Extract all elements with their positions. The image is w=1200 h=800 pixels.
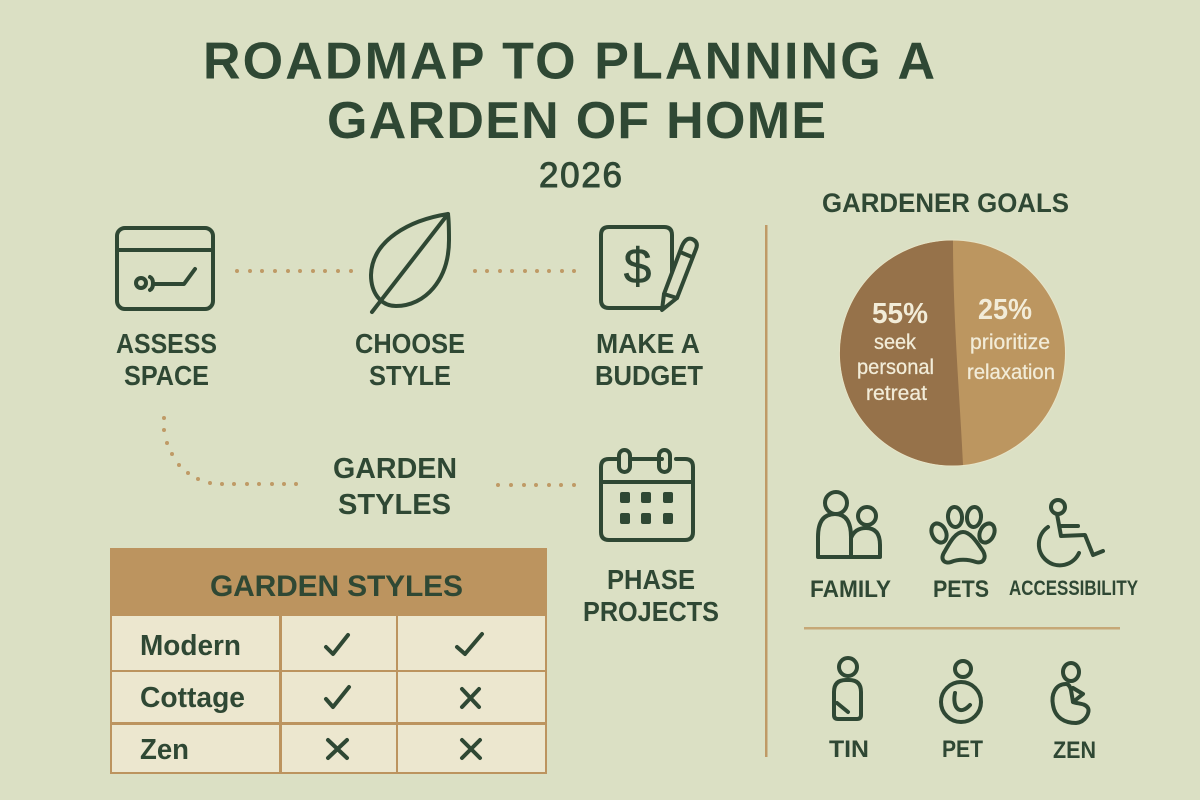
row: zen (140, 734, 480, 766)
row: cottage (140, 682, 479, 714)
icon: budget sheet and pencil (601, 227, 697, 310)
step: choose style: STYLE (369, 360, 451, 391)
step: assess space: SPACE (124, 360, 209, 391)
slice label: 55% (857, 298, 934, 405)
title (203, 32, 935, 150)
goal: accessibility: ACCESSIBILITY (1009, 577, 1138, 600)
item: zen: ZEN (1053, 737, 1096, 764)
icon: assess space (117, 228, 213, 309)
row: modern: Modern (140, 630, 241, 662)
icon: wheelchair (1039, 500, 1103, 565)
slice label: 25%: 25% (978, 294, 1032, 326)
connector: choose to budget (473, 269, 576, 273)
divider: horizontal (804, 627, 1120, 630)
goal: family: FAMILY (810, 576, 891, 603)
connector: curved path to garden styles (162, 416, 298, 486)
step: make a budget (595, 227, 703, 391)
table: garden styles (110, 548, 547, 774)
step: phase projects: PHASE (607, 564, 695, 595)
item: tin: TIN (829, 736, 869, 763)
connector: assess to choose (235, 269, 353, 273)
subtitle: year: 2026 (539, 156, 622, 195)
goal: family (810, 492, 891, 603)
step: phase projects (583, 450, 719, 627)
item: pet: PET (942, 736, 983, 763)
item: tin (829, 658, 869, 763)
table cells (112, 616, 545, 772)
step: choose style (355, 214, 465, 391)
slice label: 55%: retreat (866, 382, 927, 405)
goal: pets (928, 506, 998, 603)
item: zen (1053, 663, 1096, 764)
row: modern (140, 630, 482, 662)
row: zen: Zen (140, 734, 189, 766)
connector: garden styles to phase projects (496, 483, 576, 487)
icon: pet figure (941, 661, 981, 722)
item: pet (941, 661, 983, 763)
slice label: 25%: prioritize (970, 331, 1050, 354)
slice label: 25%: relaxation (967, 361, 1055, 384)
label: garden styles: STYLES (338, 489, 451, 521)
step: phase projects: PROJECTS (583, 596, 719, 627)
label: garden styles: GARDEN (333, 453, 457, 485)
icon: family (818, 492, 880, 557)
slice label: 25% (967, 294, 1055, 384)
table header: GARDEN STYLES (210, 570, 463, 603)
step: make a budget: BUDGET (595, 360, 703, 391)
icon: paw (928, 506, 998, 563)
goal: accessibility (1009, 500, 1138, 600)
icon: leaf (371, 214, 449, 312)
icon: budget sheet and pencil: $ (624, 238, 651, 294)
pie chart: gardener goals (839, 240, 1066, 466)
label: garden styles (333, 453, 457, 521)
icon: zen figure (1053, 663, 1088, 723)
step: assess space (116, 228, 217, 391)
slice label: 55%: seek (874, 331, 916, 354)
heading: gardener goals: GARDENER GOALS (822, 188, 1069, 218)
icon: tin figure (834, 658, 861, 719)
title: GARDEN OF HOME (327, 92, 826, 150)
divider: vertical (765, 225, 768, 757)
slice label: 55%: personal (857, 356, 934, 379)
goal: pets: PETS (933, 576, 989, 603)
step: choose style: CHOOSE (355, 328, 465, 359)
slice label: 55%: 55% (872, 298, 928, 330)
step: make a budget: MAKE A (596, 328, 700, 359)
row: cottage: Cottage (140, 682, 245, 714)
step: assess space: ASSESS (116, 328, 217, 359)
icon: calendar (601, 450, 693, 540)
title: ROADMAP TO PLANNING A (203, 32, 935, 90)
